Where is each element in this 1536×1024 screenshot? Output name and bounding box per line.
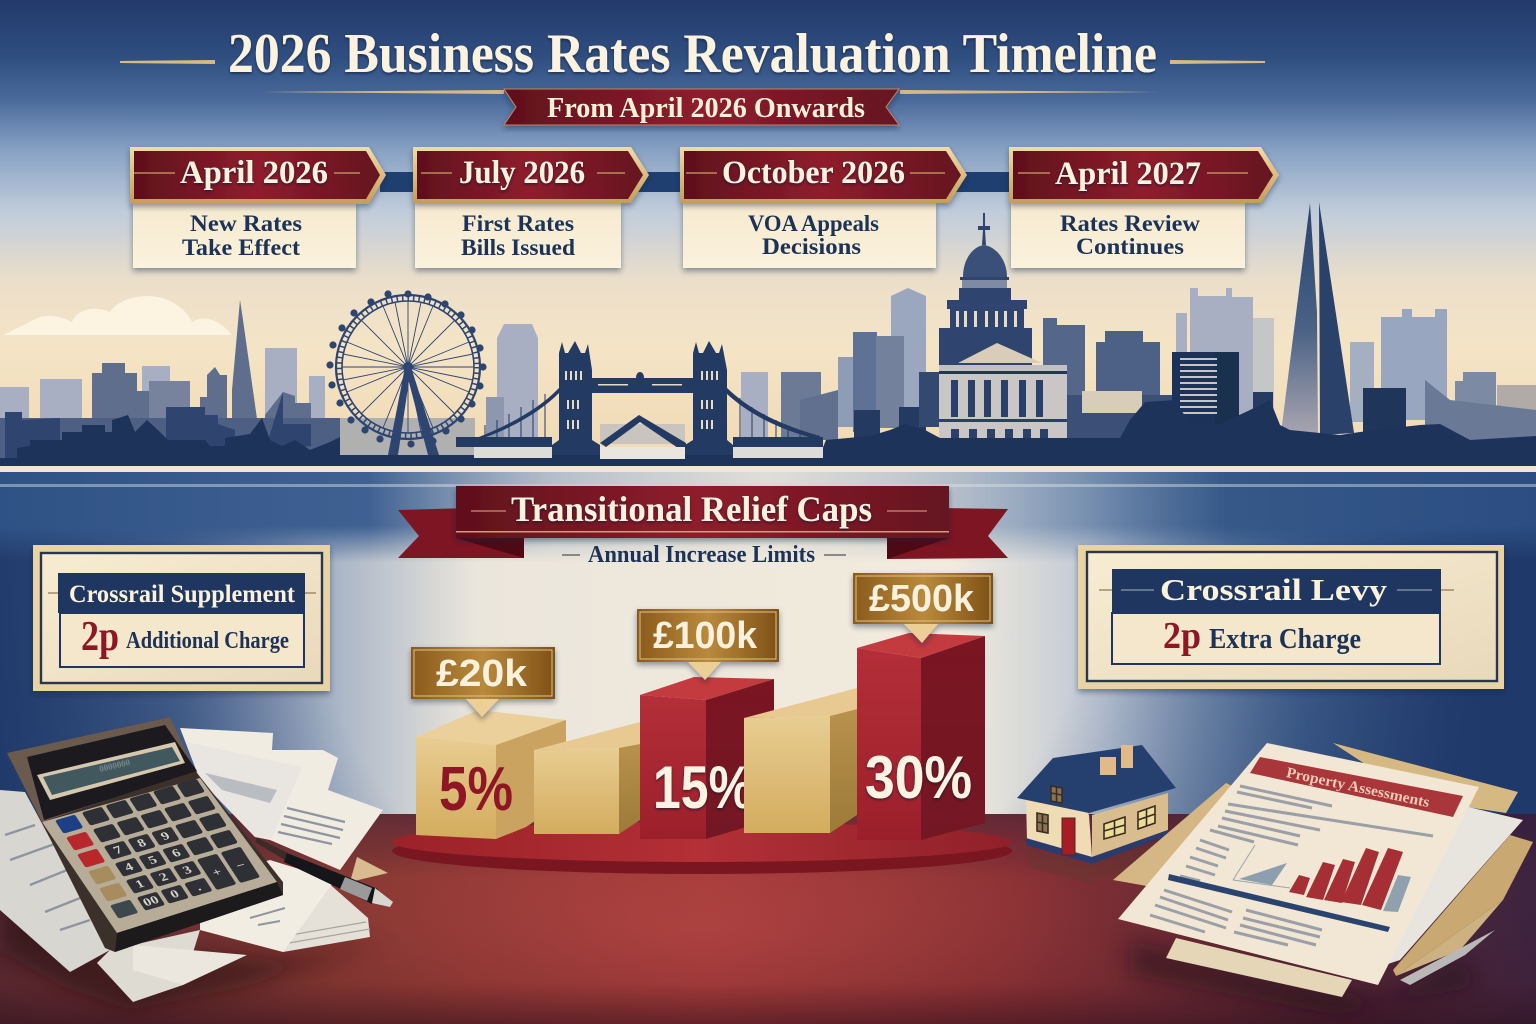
banner body <box>456 486 949 538</box>
plaque body <box>60 613 304 667</box>
plaque body: 2p <box>1163 615 1201 657</box>
mini bar chart <box>1289 848 1411 912</box>
plaque body: 2p <box>81 614 119 660</box>
icon: property assessment documents <box>1113 743 1533 1015</box>
skyline: St Paul's style dome <box>939 213 1032 368</box>
bar: 5% at £20k <box>416 710 566 839</box>
skyline: columned civic building <box>919 343 1142 439</box>
red header band <box>1250 757 1463 817</box>
main sheet <box>1118 743 1479 985</box>
date ribbon: July 2026 <box>459 155 585 191</box>
description card: Continues <box>1076 234 1184 259</box>
icon: calculator <box>7 717 283 952</box>
title: 2026 Business Rates Revaluation Timeline <box>228 23 1157 85</box>
date ribbon: October 2026 <box>722 155 905 191</box>
panel: Crossrail Supplement <box>33 545 330 691</box>
house walls <box>1026 765 1092 857</box>
date ribbon: April 2026 <box>180 155 328 191</box>
plaque header <box>58 573 305 613</box>
date ribbon <box>1009 147 1279 203</box>
panel: Crossrail Levy <box>1078 545 1504 689</box>
date ribbon <box>130 147 386 204</box>
plaque frame <box>33 545 330 691</box>
description card: New Rates <box>190 211 302 236</box>
description card: Rates Review <box>1060 211 1200 236</box>
London skyline <box>0 202 1536 466</box>
calculator display: 0000000 <box>98 757 132 774</box>
chart: relief cap 3D bars <box>392 573 1012 874</box>
banner subtitle: Annual Increase Limits <box>588 542 815 568</box>
bar: gold spacer two <box>744 688 857 833</box>
background: river <box>0 466 1536 562</box>
house chimneys <box>1100 745 1133 775</box>
house roof <box>1017 745 1176 813</box>
skyline: London Eye <box>326 290 487 455</box>
tag: £100k: £100k <box>653 615 758 657</box>
skyline: Tower Bridge <box>456 341 823 462</box>
skyline: far buildings <box>0 288 1536 458</box>
bar: 15% at £100k: 15% <box>653 754 753 821</box>
bar: gold spacer one <box>534 722 640 834</box>
subtitle text: From April 2026 Onwards <box>547 92 865 124</box>
calculator face <box>42 778 277 933</box>
description card: VOA Appeals <box>748 211 879 236</box>
timeline step: April 2027 <box>1009 147 1279 268</box>
plaque header: Crossrail Supplement <box>69 581 296 608</box>
background: sky <box>0 0 1536 470</box>
plaque body: Extra Charge <box>1209 624 1361 655</box>
description card <box>415 203 621 268</box>
calculator keys <box>55 779 260 919</box>
banner tails <box>398 508 524 558</box>
skyline: near dark blocks <box>5 352 1406 462</box>
mini area chart <box>1233 845 1290 888</box>
tag: £100k <box>637 609 779 680</box>
tag: £20k: £20k <box>436 653 528 695</box>
description card: Take Effect <box>182 235 300 260</box>
skyline: window stripes <box>1180 358 1217 414</box>
back sheets <box>1130 940 1480 1015</box>
title ornament lines <box>120 60 1265 94</box>
background: lower wall <box>0 468 1536 828</box>
skyline: foreground silhouette <box>17 400 1536 465</box>
timeline step: July 2026 <box>413 147 649 268</box>
timeline connector bar <box>380 172 1020 192</box>
panel: Transitional Relief banner <box>398 486 1008 568</box>
timeline step: April 2026 <box>130 147 386 268</box>
plaque body: Additional Charge <box>126 628 289 654</box>
icon: house <box>1017 745 1176 883</box>
tag: £500k <box>853 573 993 643</box>
skyline: mid buildings <box>0 300 1536 460</box>
red header band: Property Assessments <box>1285 765 1431 811</box>
calculator display <box>37 742 185 800</box>
plaque body <box>1112 613 1440 664</box>
background: table top <box>0 814 1536 1024</box>
house door <box>1062 818 1075 855</box>
description card <box>133 203 356 268</box>
timeline step: October 2026 <box>680 147 967 268</box>
description card: First Rates <box>462 211 574 236</box>
date ribbon: April 2027 <box>1055 156 1201 192</box>
date ribbon <box>680 147 967 203</box>
description card <box>1011 203 1245 268</box>
date ribbon <box>413 147 649 203</box>
icon: pen <box>255 838 393 907</box>
navy band <box>1168 874 1390 932</box>
description card: Decisions <box>762 234 861 259</box>
banner body: Transitional Relief Caps <box>511 489 872 529</box>
tag: £20k <box>411 647 555 717</box>
plaque header <box>1112 569 1441 613</box>
subtitle banner <box>504 89 899 125</box>
bar: 30% at £500k <box>857 633 985 840</box>
description card: Bills Issued <box>461 235 575 260</box>
tag: £500k: £500k <box>869 578 975 620</box>
house windows <box>1037 786 1155 839</box>
body lines <box>1150 786 1433 945</box>
icon: paper stack under calculator <box>0 728 388 1010</box>
description card <box>683 203 936 268</box>
plaque header: Crossrail Levy <box>1160 572 1388 607</box>
bar: 15% at £100k <box>640 677 774 839</box>
plaque frame <box>1078 545 1504 689</box>
bar: 5% at £20k: 5% <box>439 755 513 824</box>
bar: 30% at £500k: 30% <box>865 744 972 811</box>
chart platform <box>392 822 1012 874</box>
skyline: the Shard <box>1281 202 1354 435</box>
cloud <box>3 296 232 335</box>
